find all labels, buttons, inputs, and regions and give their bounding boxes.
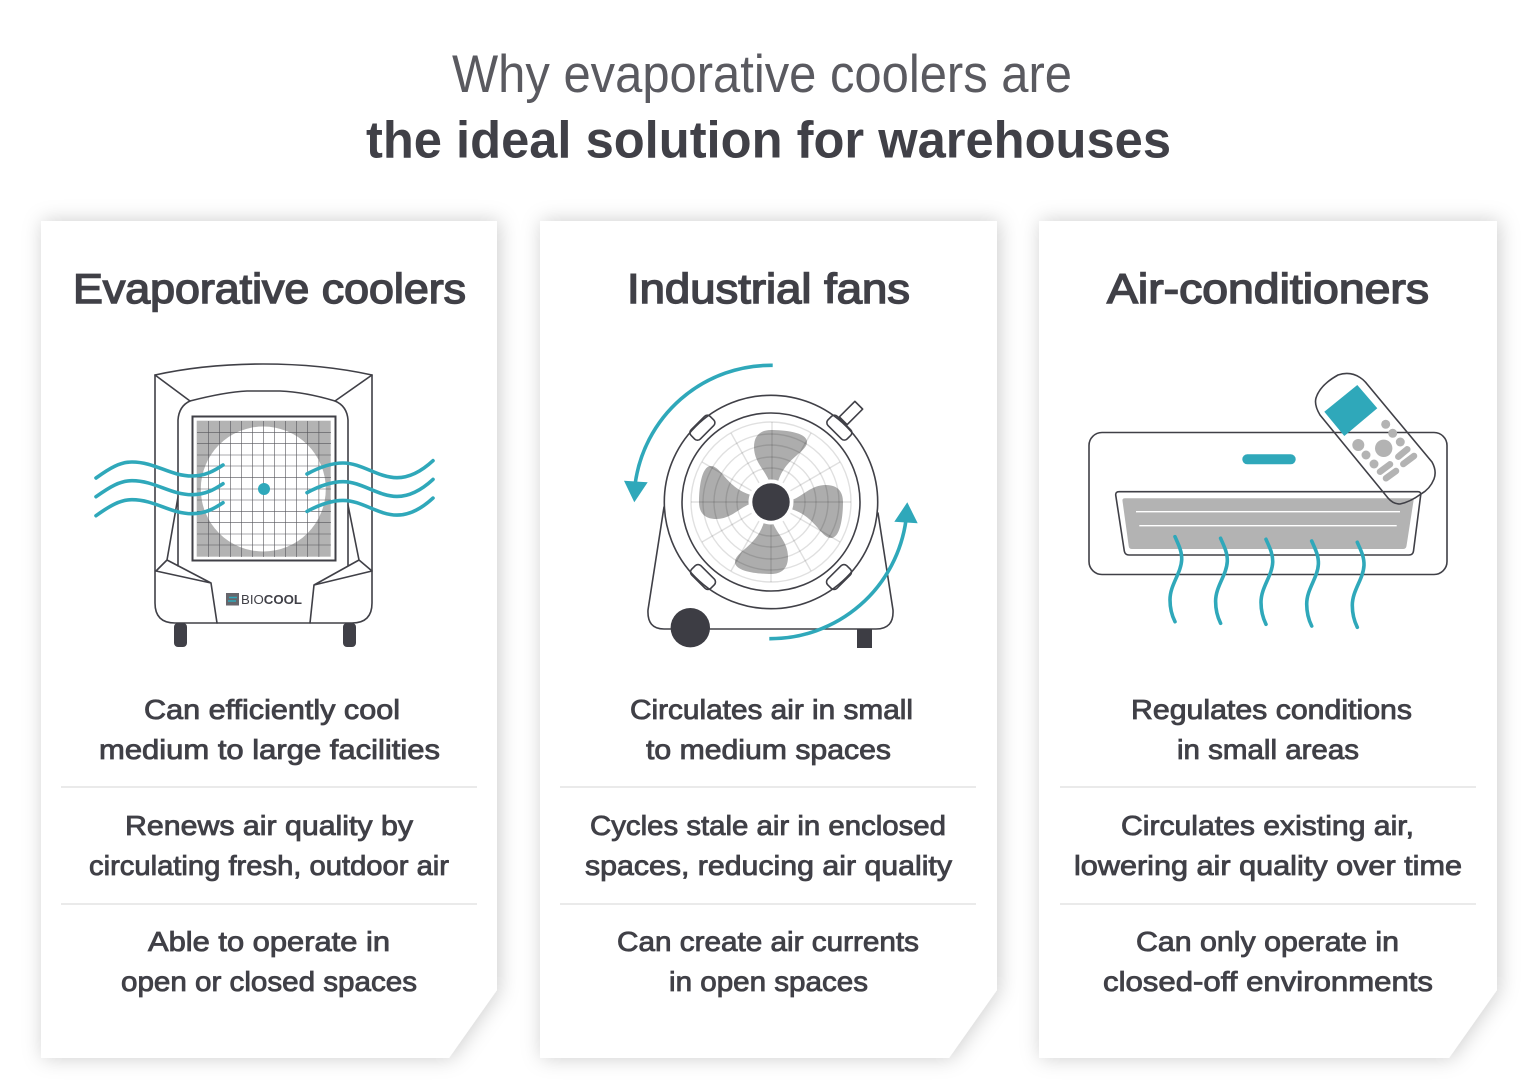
text block: operating spaces: Can only operate in xyxy=(1136,926,1399,957)
panel background xyxy=(1039,221,1497,1058)
title: the ideal solution for warehouses xyxy=(366,112,1171,170)
text block: operating spaces xyxy=(617,926,919,997)
text block: coverage: Regulates conditions xyxy=(1131,694,1412,725)
text block: operating spaces: closed-off environments xyxy=(1103,966,1433,997)
heading: Evaporative coolers xyxy=(73,265,466,312)
text block: efficiency xyxy=(99,694,440,765)
panel: industrial fans xyxy=(540,221,997,1058)
panel: evaporative coolers xyxy=(41,221,497,1058)
text block: air quality: circulating fresh, outdoor air xyxy=(89,850,449,881)
text block: air quality: Circulates existing air, xyxy=(1121,810,1414,841)
text block: operating spaces: in open spaces xyxy=(669,966,868,997)
text block: operating spaces xyxy=(121,926,417,997)
text block: air quality: Renews air quality by xyxy=(125,810,413,841)
text block: efficiency: medium to large facilities xyxy=(99,734,440,765)
text block: coverage: Circulates air in small xyxy=(630,694,913,725)
text block: air quality xyxy=(1074,810,1462,881)
panel background xyxy=(41,221,497,1058)
title xyxy=(366,45,1171,170)
text block: coverage: to medium spaces xyxy=(646,734,891,765)
icon: evaporative cooler xyxy=(96,364,433,647)
text block: operating spaces: open or closed spaces xyxy=(121,966,417,997)
icon: air conditioner and remote xyxy=(1089,373,1447,627)
text block: operating spaces: Can create air currents xyxy=(617,926,919,957)
text block: operating spaces xyxy=(1103,926,1433,997)
text block: air quality xyxy=(89,810,449,881)
text block: operating spaces: Able to operate in xyxy=(148,926,390,957)
text block: coverage: in small areas xyxy=(1177,734,1359,765)
panel: air-conditioners xyxy=(1039,221,1497,1058)
icon: evaporative cooler: BIOCOOL xyxy=(241,592,302,607)
panel background xyxy=(540,221,997,1058)
text block: coverage xyxy=(1131,694,1412,765)
text block: air quality xyxy=(585,810,952,881)
heading: Air-conditioners xyxy=(1107,265,1429,312)
heading: Industrial fans xyxy=(627,265,910,312)
text block: efficiency: Can efficiently cool xyxy=(144,694,400,725)
text block: air quality: Cycles stale air in enclosed xyxy=(590,810,946,841)
text block: coverage xyxy=(630,694,913,765)
text block: air quality: lowering air quality over time xyxy=(1074,850,1462,881)
text block: air quality: spaces, reducing air quality xyxy=(585,850,952,881)
icon: industrial fan xyxy=(624,365,918,648)
title: Why evaporative coolers are xyxy=(452,45,1072,104)
